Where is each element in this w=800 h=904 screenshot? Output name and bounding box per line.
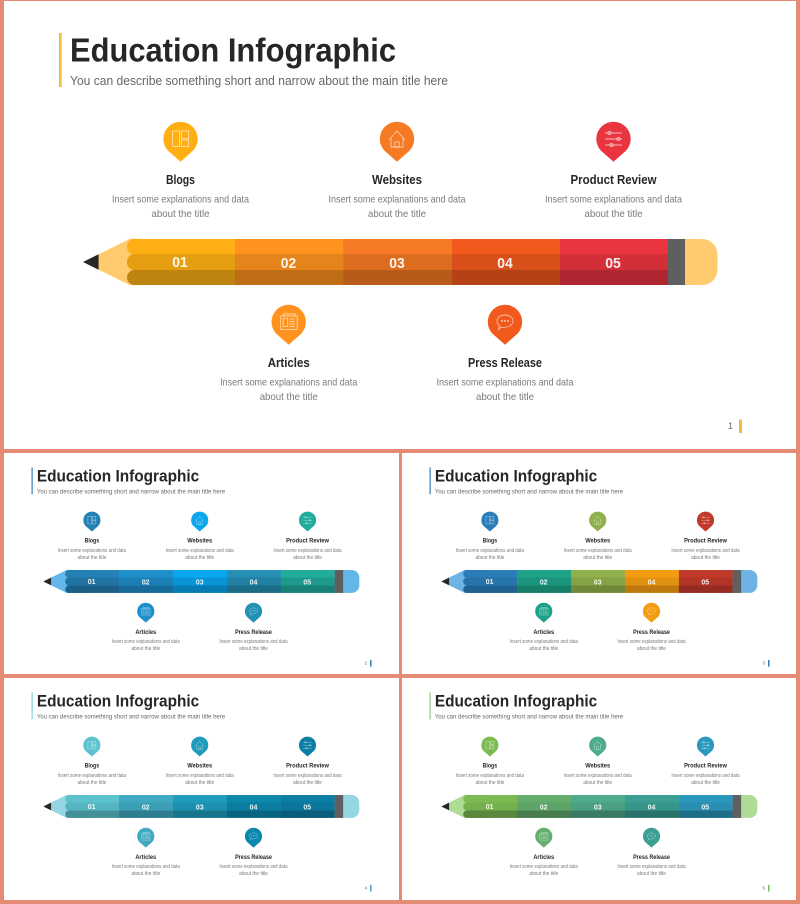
item: Articles: Articles <box>268 356 310 370</box>
item: Product Review: about the title <box>293 555 322 561</box>
item: Product Review <box>545 122 682 220</box>
item: Websites: Websites <box>187 538 213 545</box>
page number: 2 <box>365 661 368 666</box>
item: Websites: Insert some explanations and data <box>564 548 632 554</box>
pencil: 02 <box>142 802 150 811</box>
item: Articles: Insert some explanations and data <box>510 864 578 870</box>
item: Websites <box>166 512 234 561</box>
item: Press Release: about the title <box>239 646 268 652</box>
title block: Education Infographic <box>37 468 199 486</box>
item: Blogs <box>58 512 126 561</box>
title block: You can describe something short and narrow about the main title here <box>37 713 225 720</box>
item: Websites: Websites <box>585 763 611 770</box>
item: Websites: Insert some explanations and data <box>564 773 632 779</box>
title block: You can describe something short and narrow about the main title here <box>37 488 225 495</box>
panel: slide 5 green <box>402 678 796 900</box>
item: Product Review: about the title <box>691 555 720 561</box>
page number: 5 <box>763 886 766 891</box>
item: Websites <box>166 737 234 786</box>
item: Blogs <box>58 737 126 786</box>
pencil: 03 <box>196 577 204 586</box>
title block: You can describe something short and narrow about the main title here <box>435 713 623 720</box>
item: Product Review: about the title <box>691 780 720 786</box>
item: Blogs: Blogs <box>166 173 195 187</box>
item: Press Release: about the title <box>637 871 666 877</box>
pencil: 05 <box>303 802 311 811</box>
pencil <box>83 239 718 285</box>
title block: Education Infographic <box>435 468 597 486</box>
item: Articles: about the title <box>131 871 160 877</box>
page number: 3 <box>763 661 766 666</box>
title block: Education Infographic <box>70 32 396 68</box>
pencil: 01 <box>88 577 95 586</box>
item: Press Release <box>617 603 686 652</box>
item: Blogs: Blogs <box>85 763 100 770</box>
item: Product Review: Product Review <box>286 763 329 770</box>
pencil: 02 <box>281 255 296 272</box>
page number <box>763 660 770 667</box>
item: Articles: Insert some explanations and data <box>510 639 578 645</box>
item: Websites: Websites <box>585 538 611 545</box>
item: Websites: about the title <box>185 780 214 786</box>
item: Press Release: Insert some explanations and data <box>219 639 288 645</box>
item: Press Release: about the title <box>637 646 666 652</box>
item: Articles: about the title <box>529 646 558 652</box>
item: Websites <box>328 122 466 220</box>
page number <box>365 885 372 892</box>
pencil: 04 <box>497 255 513 272</box>
item: Press Release <box>219 828 288 877</box>
pencil: 05 <box>303 577 311 586</box>
pencil: 05 <box>605 255 621 272</box>
pencil: 01 <box>486 577 493 586</box>
item: Blogs: about the title <box>152 208 210 220</box>
page number: 1 <box>728 421 733 431</box>
item: Product Review: Product Review <box>570 173 657 187</box>
item: Press Release: Insert some explanations and data <box>617 864 686 870</box>
item: Websites: Websites <box>372 173 422 187</box>
item: Press Release: Press Release <box>633 854 670 861</box>
item: Articles <box>220 305 357 403</box>
item: Product Review: Insert some explanations and data <box>671 548 740 554</box>
item: Articles: Articles <box>533 854 555 861</box>
item: Blogs: about the title <box>475 555 504 561</box>
panel: slide 3 multicolour <box>402 453 796 674</box>
pencil <box>43 570 359 593</box>
title block: You can describe something short and narrow about the main title here <box>435 488 623 495</box>
item: Websites: Websites <box>187 763 213 770</box>
page number <box>365 660 372 667</box>
item: Blogs: Blogs <box>483 538 498 545</box>
item: Press Release <box>436 305 574 403</box>
pencil <box>441 570 757 593</box>
title block: Education Infographic <box>435 693 597 711</box>
title block <box>59 32 448 88</box>
item: Press Release: about the title <box>239 871 268 877</box>
pencil: 04 <box>648 802 656 811</box>
item: Product Review: Insert some explanations and data <box>273 548 342 554</box>
title block: You can describe something short and narrow about the main title here <box>70 73 448 88</box>
item: Articles: Insert some explanations and data <box>112 639 180 645</box>
item: Articles: about the title <box>260 391 318 403</box>
pencil: 05 <box>701 577 709 586</box>
item: Product Review <box>273 512 342 561</box>
item: Websites: Insert some explanations and data <box>166 548 234 554</box>
item: Product Review: Product Review <box>684 538 727 545</box>
page number <box>763 885 770 892</box>
panel: slide 4 teal <box>4 678 399 900</box>
item: Press Release: Insert some explanations and data <box>219 864 288 870</box>
item: Product Review: Insert some explanations and data <box>671 773 740 779</box>
item: Product Review: about the title <box>584 208 643 220</box>
panel: slide 1 orange <box>4 1 796 449</box>
item: Press Release: Insert some explanations and data <box>617 639 686 645</box>
item: Articles <box>112 603 180 652</box>
item: Blogs: Blogs <box>483 763 498 770</box>
item: Blogs: Insert some explanations and data <box>58 548 126 554</box>
pencil <box>43 795 359 818</box>
item: Articles <box>510 603 578 652</box>
item: Websites <box>564 737 632 786</box>
panel: slide 2 blue <box>4 453 399 674</box>
item: Press Release: Press Release <box>468 356 542 370</box>
item: Press Release <box>617 828 686 877</box>
item: Websites: about the title <box>583 780 612 786</box>
pencil: 04 <box>250 577 258 586</box>
item: Product Review: Insert some explanations and data <box>545 194 682 206</box>
item: Blogs: Insert some explanations and data <box>112 194 249 206</box>
item: Websites: about the title <box>185 555 214 561</box>
pencil: 05 <box>701 802 709 811</box>
item: Blogs: Insert some explanations and data <box>58 773 126 779</box>
item: Press Release <box>219 603 288 652</box>
title block <box>429 692 623 720</box>
item: Articles: about the title <box>529 871 558 877</box>
pencil: 01 <box>486 802 493 811</box>
item: Blogs: about the title <box>77 780 106 786</box>
item: Product Review <box>671 512 740 561</box>
item: Press Release: Insert some explanations and data <box>436 376 574 388</box>
item: Blogs: Insert some explanations and data <box>456 773 524 779</box>
item: Blogs: about the title <box>475 780 504 786</box>
item: Websites: about the title <box>368 208 426 220</box>
item: Product Review: about the title <box>293 780 322 786</box>
item: Press Release: Press Release <box>235 629 272 636</box>
pencil: 03 <box>389 255 405 272</box>
item: Articles <box>510 828 578 877</box>
item: Blogs: about the title <box>77 555 106 561</box>
item: Websites: Insert some explanations and data <box>166 773 234 779</box>
pencil: 02 <box>540 577 548 586</box>
item: Blogs <box>456 512 524 561</box>
pencil: 04 <box>250 802 258 811</box>
item: Websites: Insert some explanations and data <box>328 194 466 206</box>
pencil: 01 <box>88 802 95 811</box>
item: Press Release: Press Release <box>235 854 272 861</box>
item: Product Review <box>273 737 342 786</box>
item: Articles: Articles <box>135 854 157 861</box>
item: Product Review: Product Review <box>684 763 727 770</box>
item: Blogs <box>112 122 249 220</box>
item: Product Review: Product Review <box>286 538 329 545</box>
title block: Education Infographic <box>37 693 199 711</box>
item: Blogs: Blogs <box>85 538 100 545</box>
pencil: 03 <box>594 577 602 586</box>
pencil: 01 <box>172 254 188 271</box>
item: Press Release: about the title <box>476 391 534 403</box>
pencil: 02 <box>142 577 150 586</box>
item: Articles <box>112 828 180 877</box>
title block <box>31 467 225 495</box>
item: Articles: Articles <box>533 629 555 636</box>
item: Articles: about the title <box>131 646 160 652</box>
item: Articles: Insert some explanations and data <box>112 864 180 870</box>
pencil: 02 <box>540 802 548 811</box>
item: Product Review: Insert some explanations and data <box>273 773 342 779</box>
pencil <box>441 795 757 818</box>
item: Articles: Insert some explanations and data <box>220 376 357 388</box>
pencil: 03 <box>594 802 602 811</box>
item: Blogs: Insert some explanations and data <box>456 548 524 554</box>
title block <box>429 467 623 495</box>
title block <box>31 692 225 720</box>
item: Websites <box>564 512 632 561</box>
page number <box>728 420 742 433</box>
item: Blogs <box>456 737 524 786</box>
pencil: 03 <box>196 802 204 811</box>
item: Product Review <box>671 737 740 786</box>
item: Articles: Articles <box>135 629 157 636</box>
item: Press Release: Press Release <box>633 629 670 636</box>
page number: 4 <box>365 886 368 891</box>
pencil: 04 <box>648 577 656 586</box>
item: Websites: about the title <box>583 555 612 561</box>
